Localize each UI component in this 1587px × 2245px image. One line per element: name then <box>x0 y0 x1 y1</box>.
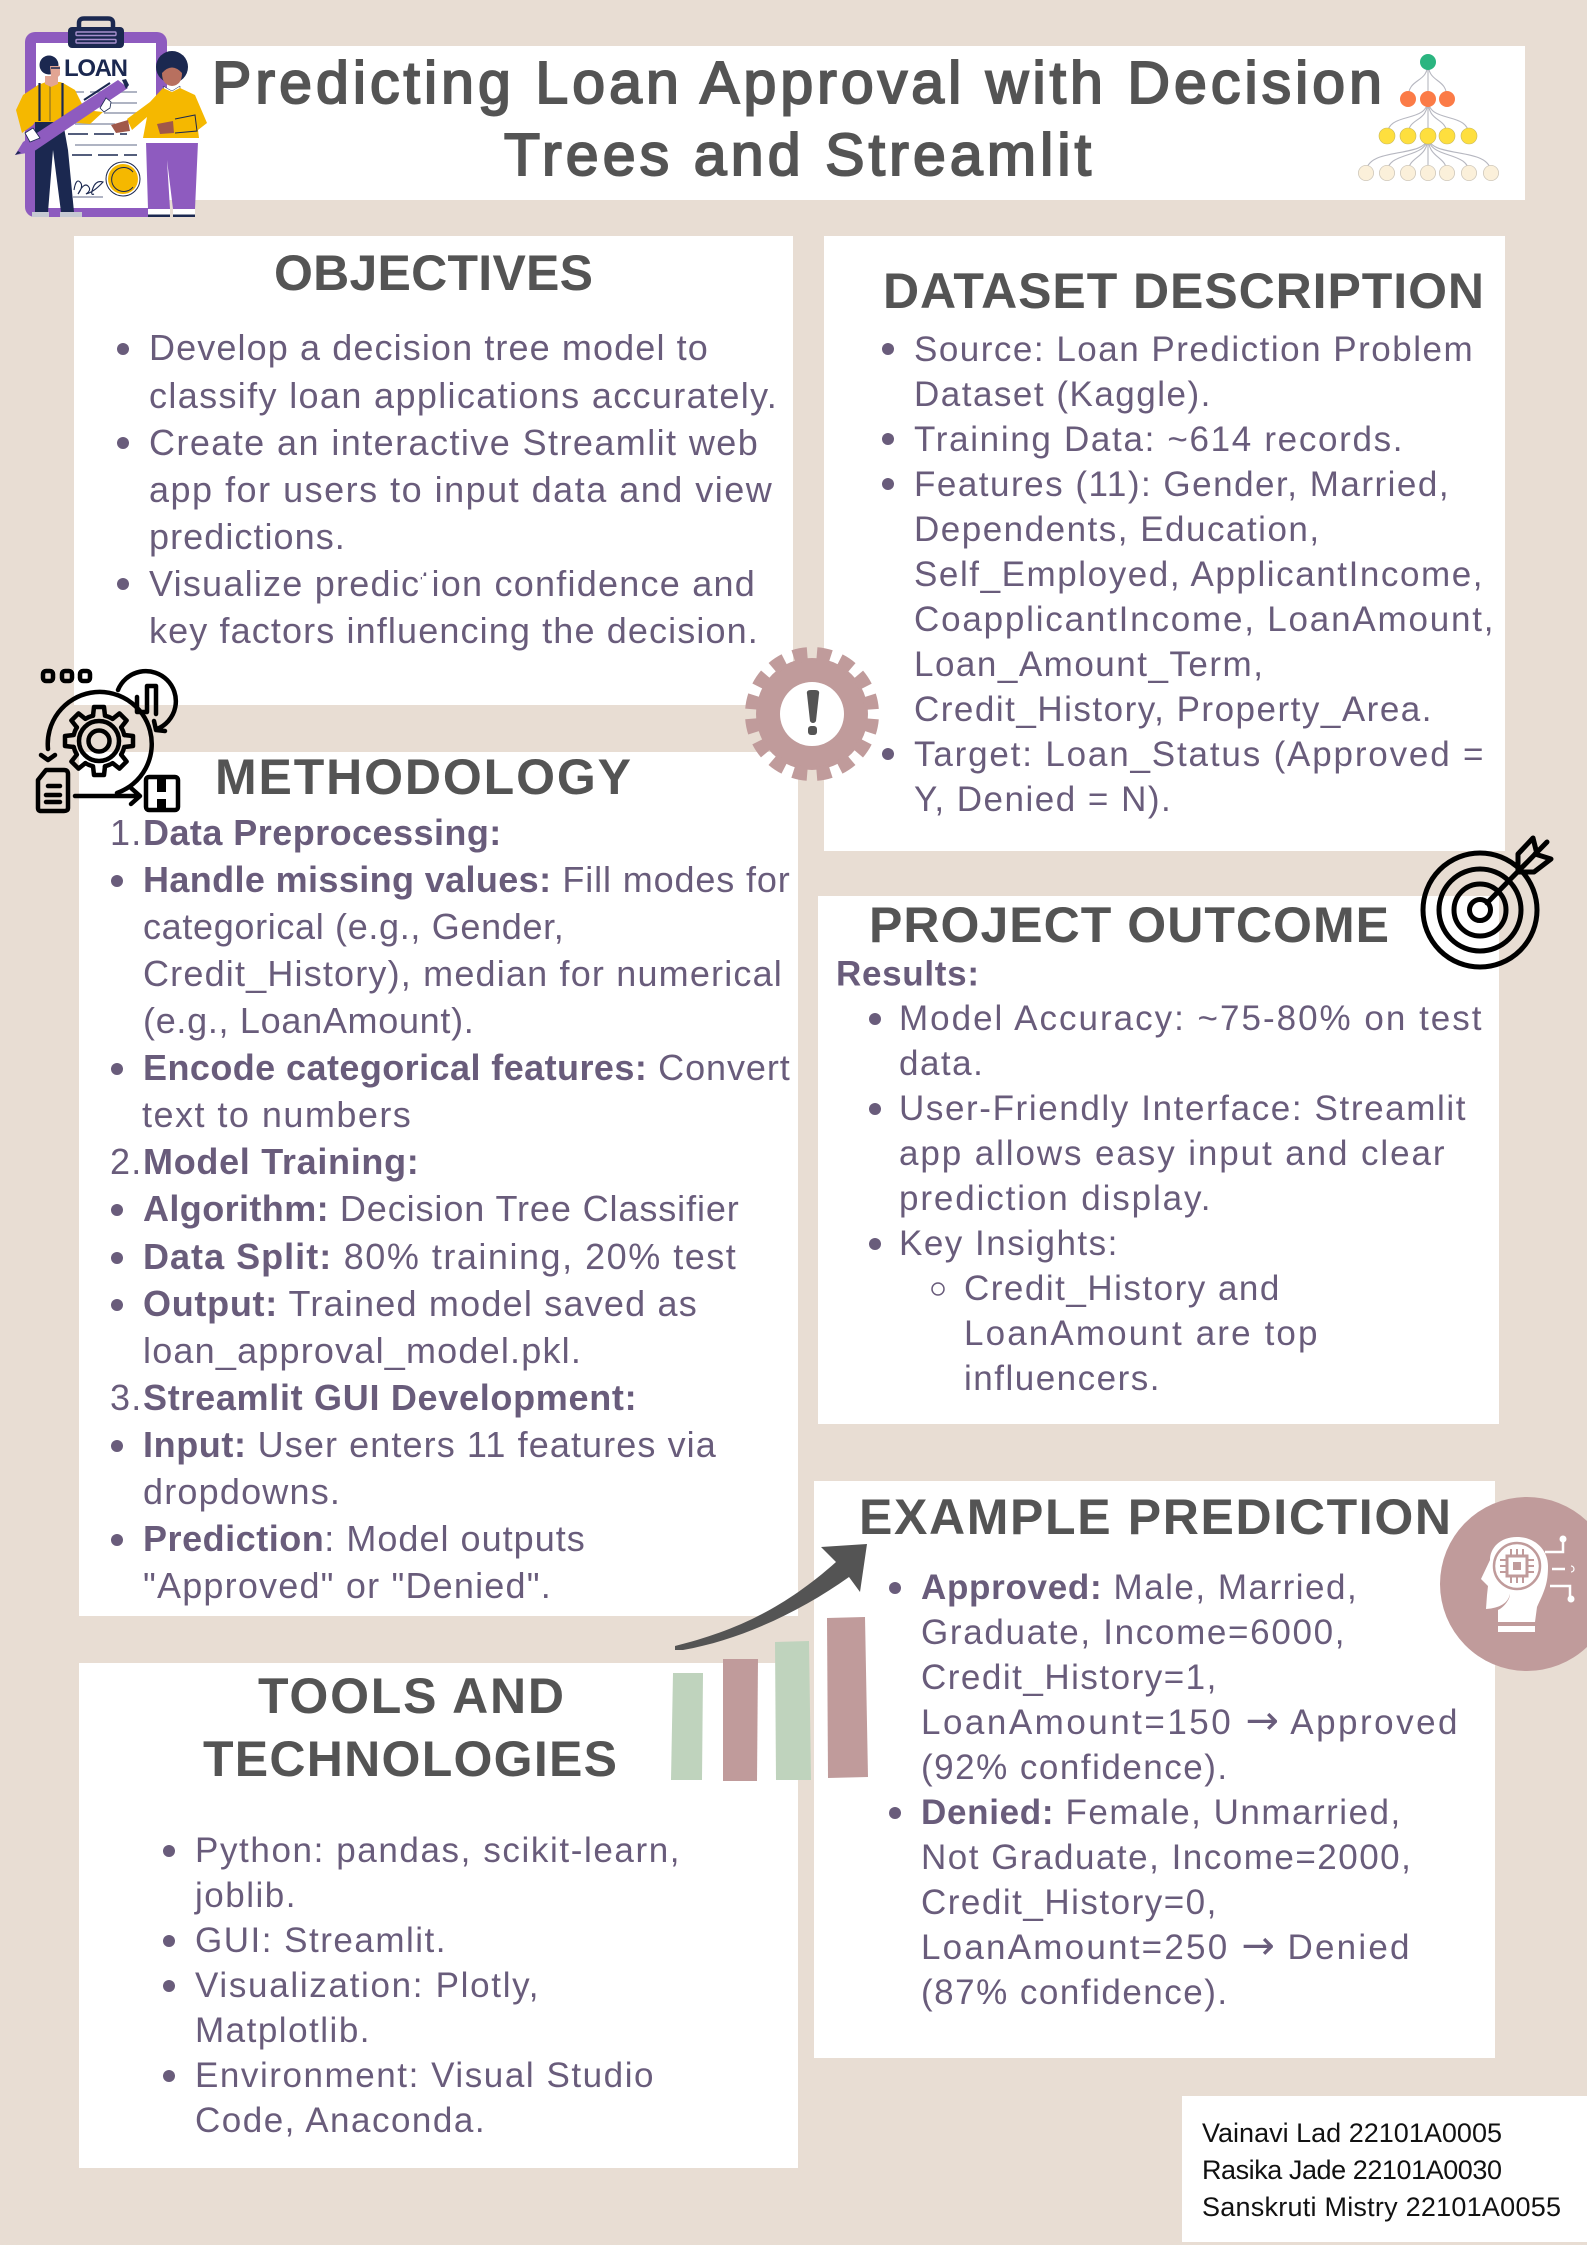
credits: Sanskruti Mistry 22101A0055 <box>1202 2192 1561 2222</box>
panel: tools background <box>79 1663 798 2168</box>
dataset list: Features (11): Gender, Married, <box>914 465 1450 504</box>
methodology heading: METHODOLOGY <box>215 749 631 805</box>
objectives list: app for users to input data and view <box>149 469 773 510</box>
dataset list: Dependents, Education, <box>914 510 1321 549</box>
example prediction heading: EXAMPLE PREDICTION <box>859 1489 1451 1545</box>
title <box>212 50 1382 188</box>
tools list: joblib. <box>194 1876 297 1915</box>
dataset list: Source: Loan Prediction Problem <box>914 330 1474 369</box>
icon: gear with exclamation mark <box>752 654 872 774</box>
example prediction list: LoanAmount=250 → Denied <box>921 1923 1411 1969</box>
objectives list: classify loan applications accurately. <box>149 375 778 416</box>
dataset list: Target: Loan_Status (Approved = <box>914 735 1485 774</box>
credits <box>1202 2118 1561 2222</box>
example prediction list: LoanAmount=150 → Approved <box>921 1698 1459 1744</box>
methodology list: 1. <box>110 812 142 853</box>
objectives list: Visualize prediction confidence and <box>149 563 756 604</box>
panel: dataset background <box>824 236 1505 851</box>
icon: loan clipboard with two people <box>15 18 207 217</box>
dataset list: Y, Denied = N). <box>914 780 1172 819</box>
icon: rising arrow <box>675 1544 867 1650</box>
methodology list: Output: Trained model saved as <box>143 1283 698 1324</box>
project outcome list: app allows easy input and clear <box>899 1134 1446 1173</box>
tools heading: TECHNOLOGIES <box>203 1731 617 1787</box>
title: Trees and Streamlit <box>504 122 1091 188</box>
methodology list: Data Preprocessing: <box>143 812 502 853</box>
example prediction list: Graduate, Income=6000, <box>921 1613 1346 1652</box>
project outcome list: Key Insights: <box>899 1224 1119 1263</box>
icon: process cycle with gear <box>38 671 178 811</box>
methodology list: Data Split: 80% training, 20% test <box>143 1236 737 1277</box>
objectives list: Develop a decision tree model to <box>149 327 709 368</box>
tools list: Code, Anaconda. <box>195 2101 486 2140</box>
tools list: GUI: Streamlit. <box>195 1921 447 1960</box>
methodology list: text to numbers <box>142 1094 412 1135</box>
dataset list: Dataset (Kaggle). <box>914 375 1212 414</box>
methodology list: Streamlit GUI Development: <box>143 1377 637 1418</box>
icon: decision tree <box>1358 54 1499 181</box>
example prediction list: Denied: Female, Unmarried, <box>921 1793 1402 1832</box>
project outcome list: influencers. <box>964 1359 1161 1398</box>
tools list: Visualization: Plotly, <box>195 1966 540 2005</box>
bar chart with rising arrow <box>671 1544 868 1781</box>
methodology list: Credit_History), median for numerical <box>143 953 783 994</box>
methodology list: dropdowns. <box>143 1471 341 1512</box>
icon: circle with AI head <box>1440 1497 1587 1671</box>
example prediction list: Credit_History=1, <box>921 1658 1218 1697</box>
example prediction list: (87% confidence). <box>921 1973 1229 2012</box>
project outcome list: prediction display. <box>899 1179 1212 1218</box>
tools list <box>163 1831 681 2140</box>
project outcome heading: PROJECT OUTCOME <box>869 897 1389 953</box>
methodology list <box>110 812 791 1606</box>
project outcome list: Model Accuracy: ~75-80% on test <box>899 999 1483 1038</box>
example prediction list: Approved: Male, Married, <box>921 1568 1358 1607</box>
credits: Rasika Jade 22101A0030 <box>1202 2155 1502 2185</box>
example prediction list: Not Graduate, Income=2000, <box>921 1838 1412 1877</box>
panel: credits background <box>1182 2096 1587 2242</box>
icon: target with arrow <box>1423 838 1551 967</box>
methodology list: loan_approval_model.pkl. <box>143 1330 582 1371</box>
project outcome list: Credit_History and <box>964 1269 1281 1308</box>
panel: title background <box>160 46 1525 200</box>
methodology list: Handle missing values: Fill modes for <box>143 859 791 900</box>
project outcome list: LoanAmount are top <box>964 1314 1319 1353</box>
panel: objectives background <box>74 236 793 705</box>
tools heading <box>203 1668 617 1787</box>
methodology list: Encode categorical features: Convert <box>143 1047 791 1088</box>
methodology list: Prediction: Model outputs <box>143 1518 586 1559</box>
methodology list: Algorithm: Decision Tree Classifier <box>143 1188 740 1229</box>
methodology list: Input: User enters 11 features via <box>143 1424 717 1465</box>
methodology list: 2. <box>110 1141 142 1182</box>
methodology list: 3. <box>110 1377 142 1418</box>
dataset list: Loan_Amount_Term, <box>914 645 1264 684</box>
objectives heading: OBJECTIVES <box>274 245 593 301</box>
panel: example background <box>814 1481 1495 2058</box>
tools list: Python: pandas, scikit-learn, <box>195 1831 681 1870</box>
panel: outcome background <box>818 896 1499 1424</box>
dataset list: Training Data: ~614 records. <box>914 420 1404 459</box>
project outcome list: User-Friendly Interface: Streamlit <box>899 1089 1467 1128</box>
methodology list: Model Training: <box>143 1141 420 1182</box>
methodology list: (e.g., LoanAmount). <box>143 1000 475 1041</box>
title: Predicting Loan Approval with Decision <box>212 50 1382 116</box>
tools list: Environment: Visual Studio <box>195 2056 655 2095</box>
dataset list: Credit_History, Property_Area. <box>914 690 1433 729</box>
objectives list <box>117 327 778 651</box>
example prediction list: Credit_History=0, <box>921 1883 1218 1922</box>
project outcome list: Results: <box>836 954 980 994</box>
tools heading: TOOLS AND <box>258 1668 564 1724</box>
panel: methodology background <box>79 752 798 1616</box>
objectives list: predictions. <box>149 516 346 557</box>
credits: Vainavi Lad 22101A0005 <box>1202 2118 1502 2148</box>
dataset list: CoapplicantIncome, LoanAmount, <box>914 600 1495 639</box>
dataset heading: DATASET DESCRIPTION <box>883 263 1484 319</box>
icon: loan clipboard with two people: LOAN <box>64 55 128 82</box>
project outcome list: data. <box>899 1044 984 1083</box>
dataset list <box>882 330 1495 819</box>
example prediction list: (92% confidence). <box>921 1748 1229 1787</box>
methodology list: categorical (e.g., Gender, <box>143 906 565 947</box>
example prediction list <box>889 1568 1459 2012</box>
objectives list: Create an interactive Streamlit web <box>149 422 759 463</box>
dataset list: Self_Employed, ApplicantIncome, <box>914 555 1484 594</box>
methodology list: "Approved" or "Denied". <box>143 1565 552 1606</box>
tools list: Matplotlib. <box>195 2011 371 2050</box>
project outcome list <box>836 954 1483 1398</box>
objectives list: key factors influencing the decision. <box>149 610 759 651</box>
